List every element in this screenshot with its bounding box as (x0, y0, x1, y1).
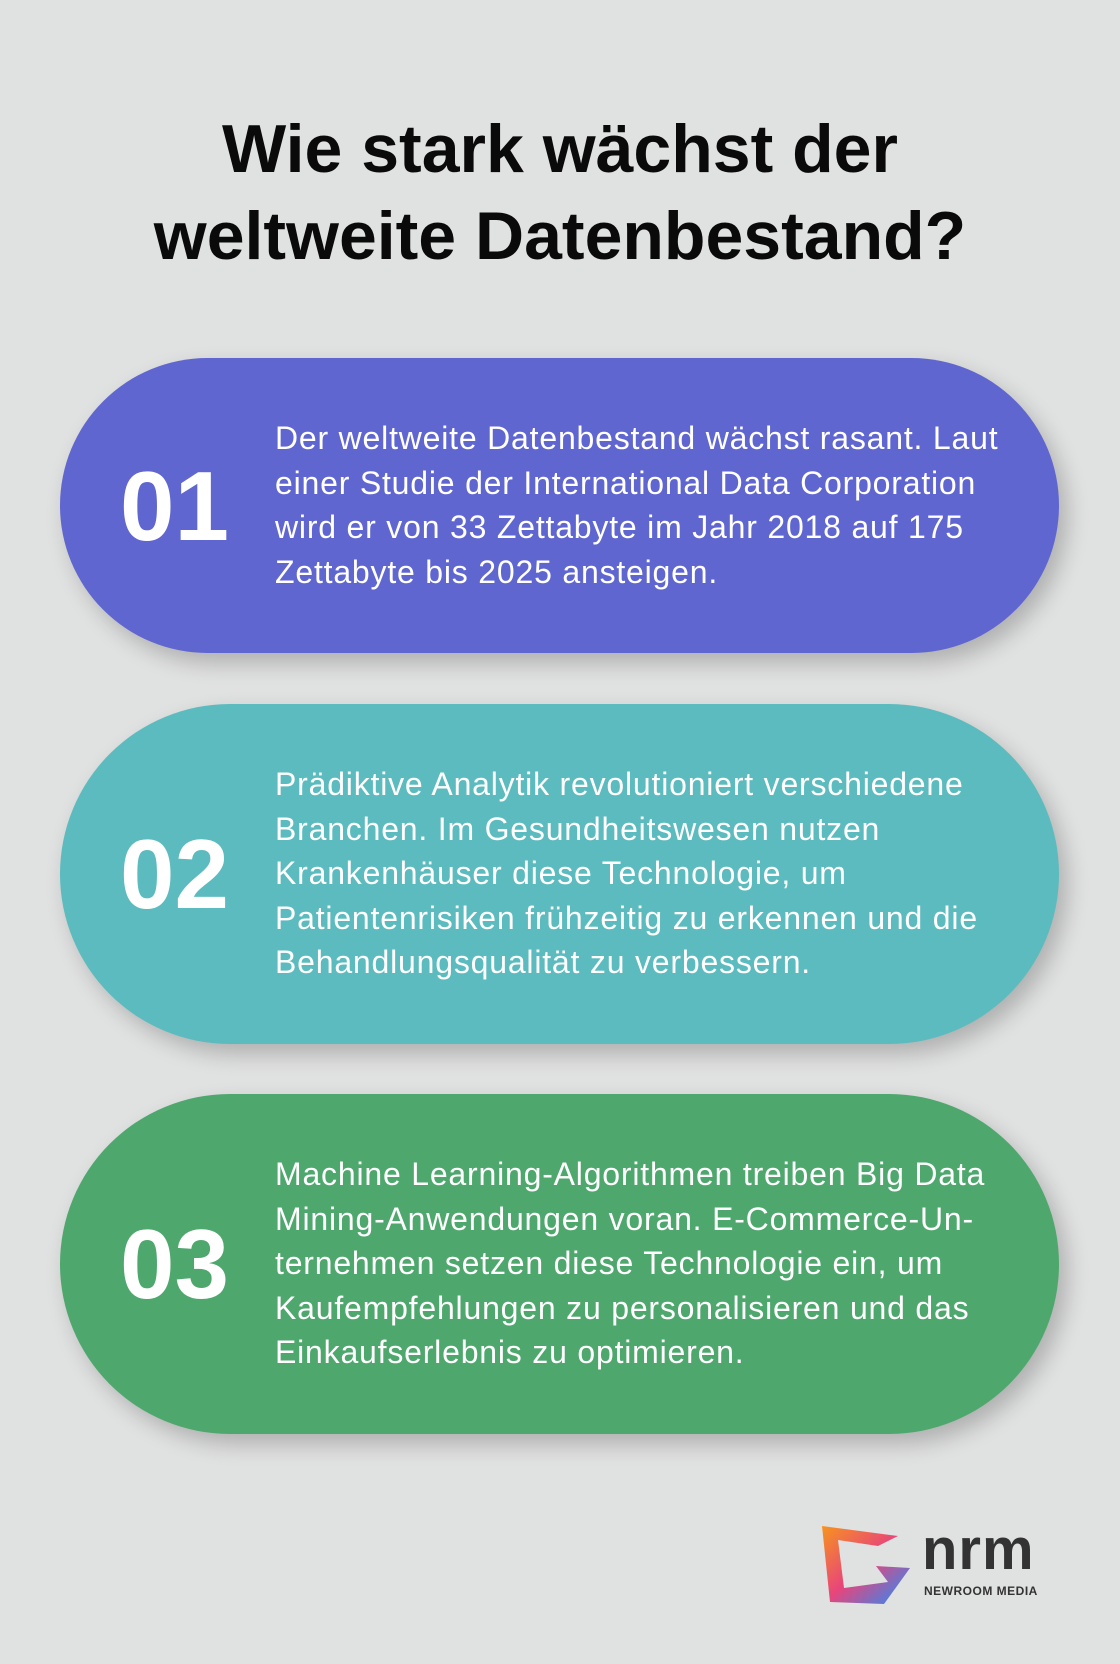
logo text: nrm (922, 1517, 1035, 1582)
text 01: einer Studie der International Data Corporation (275, 464, 976, 500)
text 02: Branchen. Im Gesundheitswesen nutzen (275, 810, 880, 846)
panel: 01 (60, 358, 1059, 653)
text 02: Prädiktive Analytik revolutioniert verschiedene (275, 766, 964, 802)
icon: logo mark (822, 1526, 910, 1604)
title: weltweite Datenbestand? (154, 198, 966, 274)
title (154, 111, 966, 274)
text 03: Kaufempfehlungen zu personalisieren und das (275, 1290, 969, 1326)
number 02: 02 (120, 819, 229, 929)
title: Wie stark wächst der (222, 111, 898, 187)
text 02 (275, 766, 978, 980)
text 03: Einkaufserlebnis zu optimieren. (275, 1334, 744, 1370)
text 03: ternehmen setzen diese Technologie ein, um (275, 1245, 943, 1281)
number 03: 03 (120, 1209, 229, 1319)
text 03: Mining-Anwendungen voran. E-Commerce-Un- (275, 1200, 974, 1236)
text 03: Machine Learning-Algorithmen treiben Big Data (275, 1156, 985, 1192)
panel: 02 (60, 704, 1059, 1044)
text 01 (275, 420, 998, 590)
text 02: Krankenhäuser diese Technologie, um (275, 855, 847, 891)
logo (822, 1517, 1038, 1604)
text 01: wird er von 33 Zettabyte im Jahr 2018 auf 175 (275, 509, 964, 545)
text 03 (275, 1156, 985, 1370)
text 01: Der weltweite Datenbestand wächst rasant. Laut (275, 420, 998, 456)
text 01: Zettabyte bis 2025 ansteigen. (275, 554, 718, 590)
text 02: Patientenrisiken frühzeitig zu erkennen und die (275, 900, 978, 936)
number 01: 01 (120, 451, 229, 561)
text 02: Behandlungsqualität zu verbessern. (275, 944, 811, 980)
logo: NEWROOM MEDIA (924, 1584, 1038, 1598)
panel: 03 (60, 1094, 1059, 1434)
